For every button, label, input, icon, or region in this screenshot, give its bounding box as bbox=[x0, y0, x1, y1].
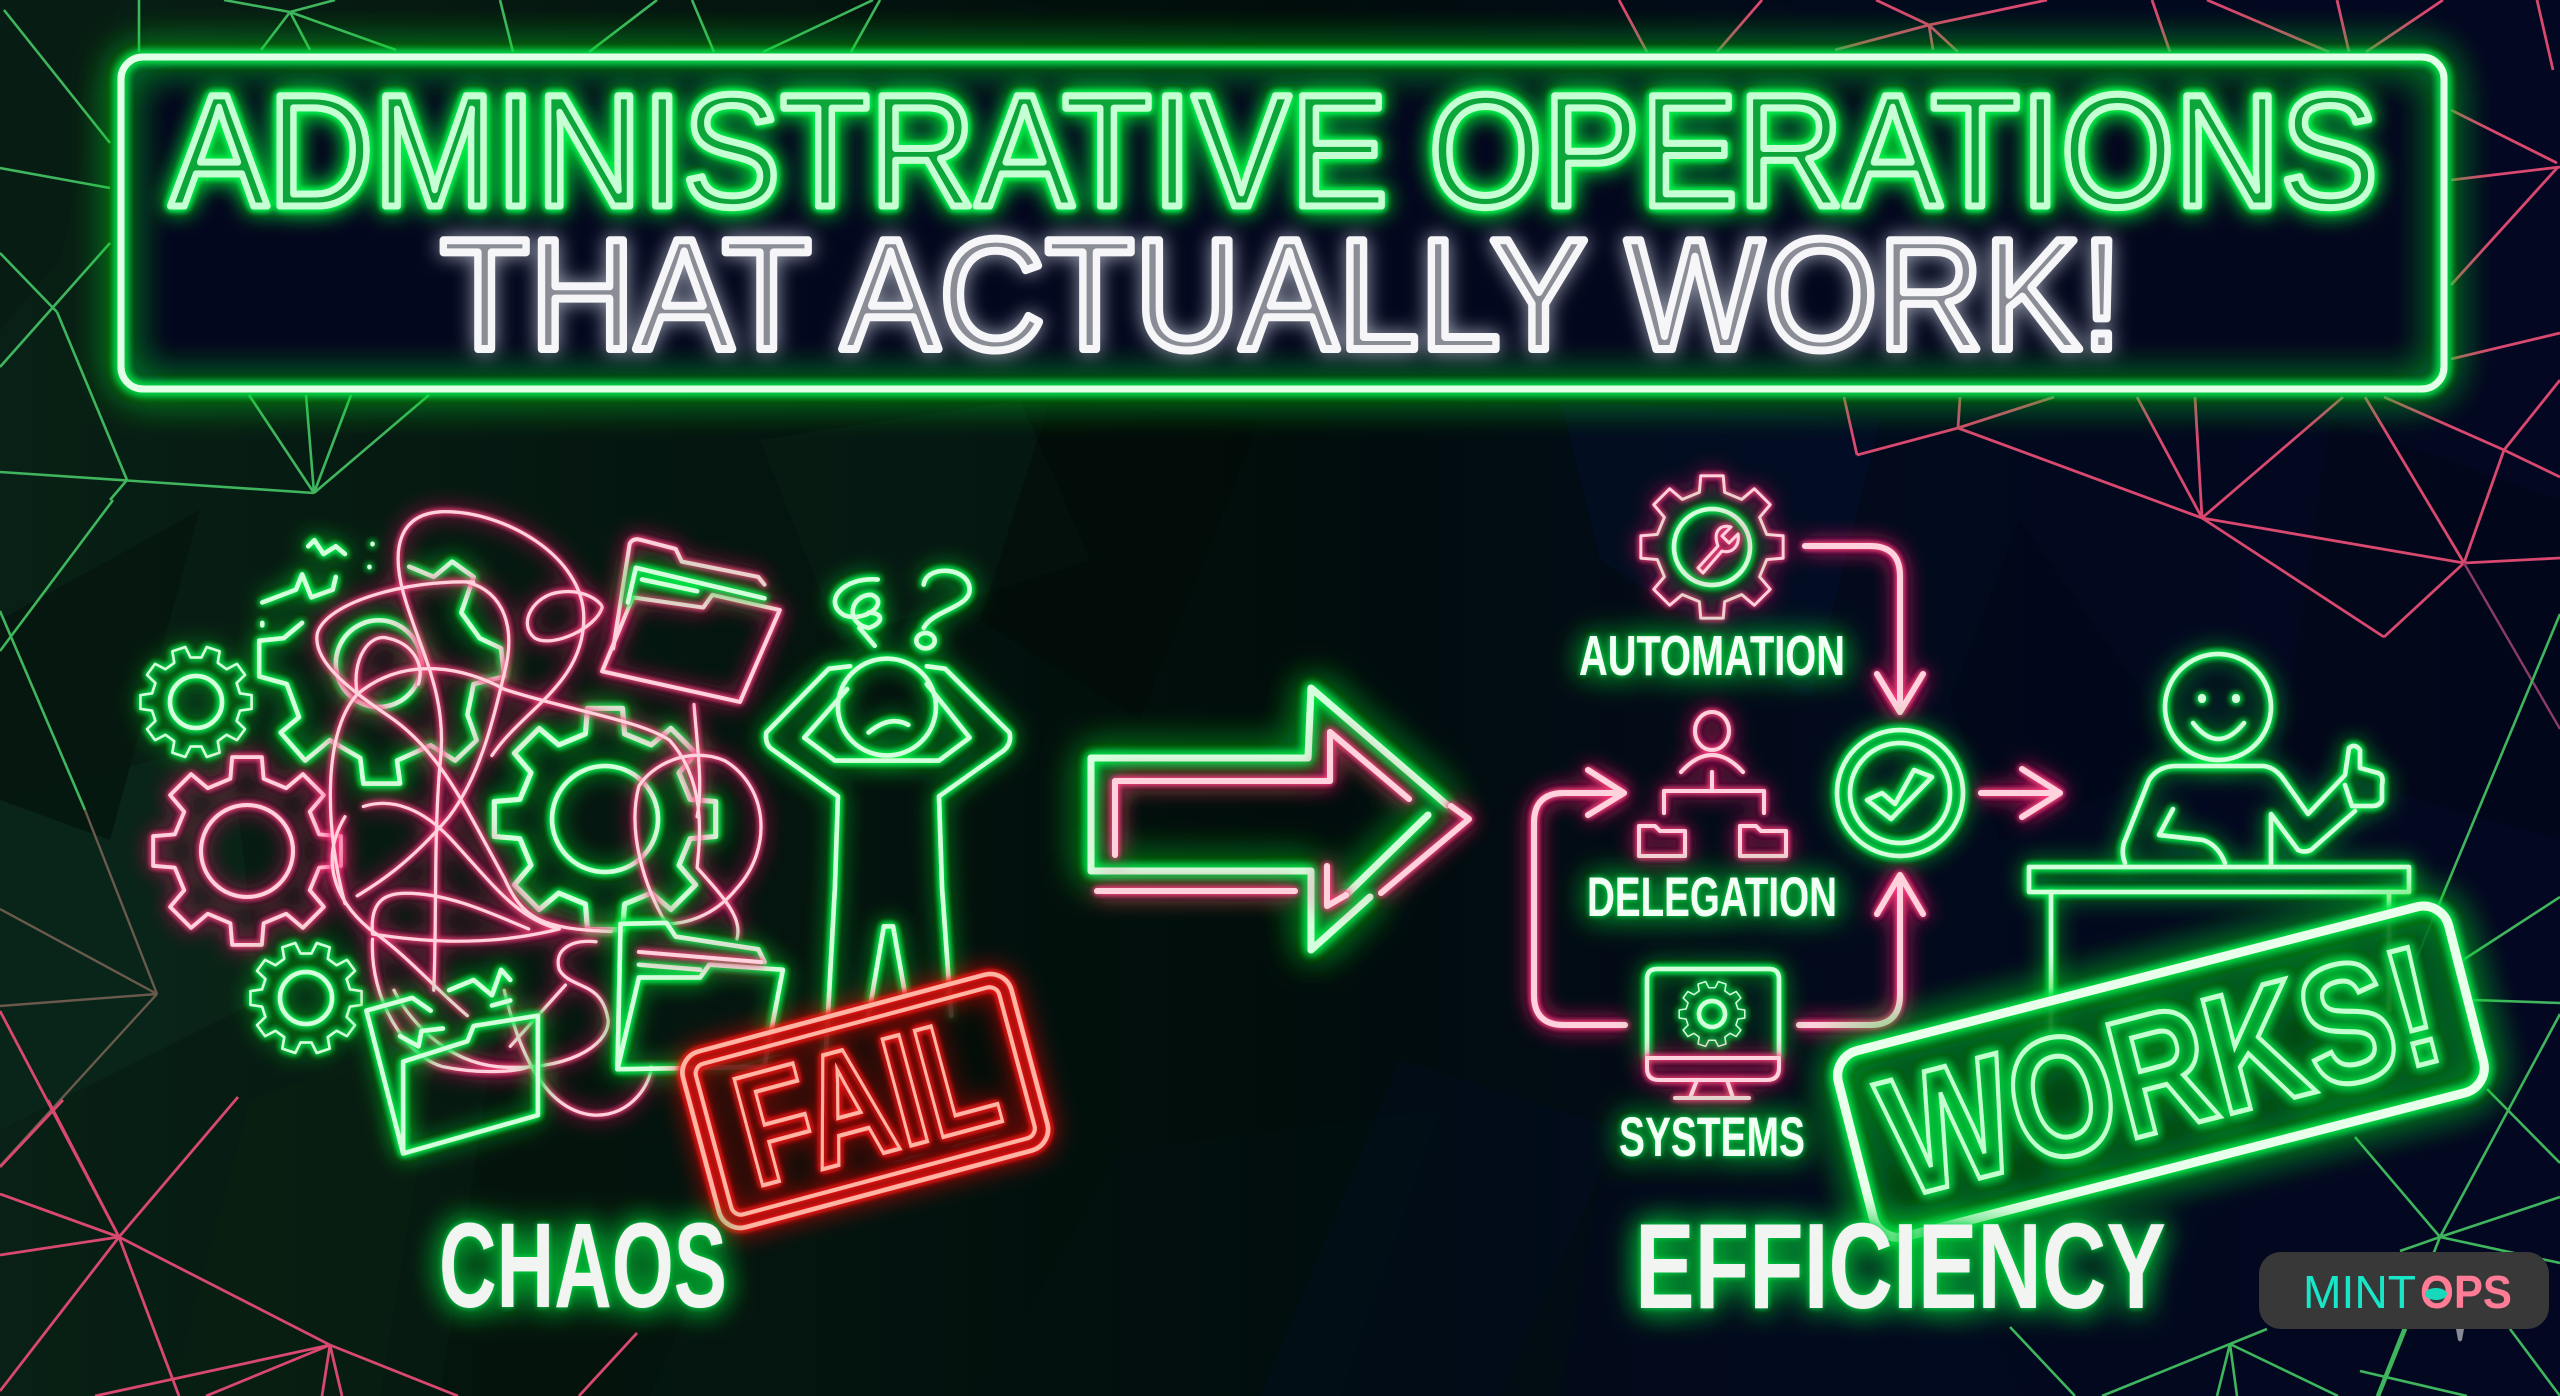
automation gear icon bbox=[1641, 476, 1783, 618]
stressed person bbox=[766, 571, 1010, 1057]
logo badge: MINT bbox=[2303, 1266, 2416, 1318]
network lines: left fading brown bbox=[0, 810, 157, 1166]
pink gear left bbox=[153, 757, 341, 945]
network lines: bottom right green bbox=[2010, 614, 2560, 1396]
arrow: automation to check bbox=[1805, 546, 1923, 712]
small green gear bottom bbox=[250, 943, 362, 1053]
title line 2: THAT ACTUALLY WORK! bbox=[440, 207, 2122, 383]
network lines: bottom left pink bbox=[0, 1011, 637, 1396]
green folder bottom bbox=[366, 970, 538, 1153]
small green gear top bbox=[140, 647, 252, 757]
large green gear bbox=[494, 708, 716, 930]
happy person at desk bbox=[2029, 654, 2409, 1030]
check circle bbox=[1837, 730, 1963, 856]
arrow green outline bbox=[1091, 688, 1447, 950]
chaos label: CHAOS bbox=[439, 1197, 727, 1333]
logo badge: OPS bbox=[2420, 1266, 2512, 1318]
network lines: top left green bbox=[0, 0, 880, 810]
folder papers pink bbox=[639, 952, 761, 962]
arrow pink inner outline bbox=[1097, 732, 1469, 906]
green folder lower right bbox=[617, 923, 783, 1069]
FAIL stamp: FAIL bbox=[717, 980, 1015, 1220]
network lines: right fading purple bbox=[2464, 563, 2560, 729]
transition arrow bbox=[1091, 688, 1469, 950]
delegation org chart icon bbox=[1639, 712, 1786, 856]
arrow: check to person bbox=[1981, 769, 2060, 817]
logo badge bbox=[2259, 1252, 2549, 1342]
systems monitor base bbox=[1647, 1058, 1779, 1098]
loop arrow: systems to delegation bbox=[1534, 770, 1625, 1025]
efficiency flow diagram bbox=[1534, 476, 2060, 1168]
title line 1: ADMINISTRATIVE OPERATIONS bbox=[170, 61, 2378, 240]
folder papers top bbox=[628, 568, 764, 602]
network lines: top right pink bbox=[1619, 0, 2560, 637]
automation label: AUTOMATION bbox=[1579, 624, 1845, 688]
chaos illustration bbox=[140, 512, 1010, 1153]
efficiency label: EFFICIENCY bbox=[1635, 1198, 2166, 1334]
pink folder top right bbox=[602, 539, 780, 702]
broken gear and fragments bbox=[259, 540, 504, 784]
tangled pink scribble bbox=[317, 512, 761, 1115]
systems label: SYSTEMS bbox=[1619, 1105, 1805, 1168]
title panel frame bbox=[121, 57, 2444, 389]
systems monitor screen bbox=[1647, 969, 1779, 1056]
arrow: systems to check bbox=[1799, 875, 1923, 1025]
delegation label: DELEGATION bbox=[1587, 865, 1837, 928]
